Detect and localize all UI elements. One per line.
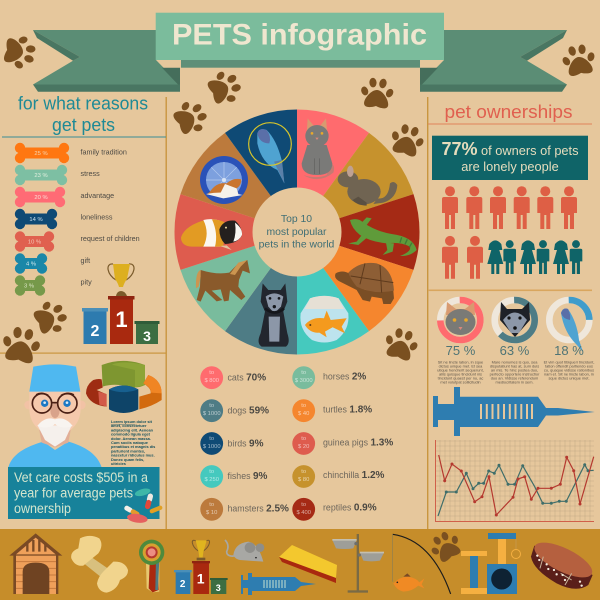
icon: horse bbox=[196, 260, 250, 302]
price circles: to bbox=[209, 436, 214, 442]
icon: goldfish bowl bbox=[300, 296, 349, 342]
price circles: to bbox=[301, 370, 306, 376]
bone chart: 20 % bbox=[34, 195, 48, 201]
callout: vet cost bbox=[8, 467, 160, 519]
icon: trophy and podium: 1 bbox=[115, 307, 128, 332]
price circles: $ 800 bbox=[204, 378, 219, 384]
paw print bbox=[387, 121, 428, 159]
donut captions bbox=[437, 360, 594, 384]
pictogram: people bbox=[442, 186, 582, 279]
paw print bbox=[169, 95, 213, 140]
icon: husky dog bbox=[259, 283, 289, 347]
price circles: to bbox=[301, 436, 306, 442]
donut captions: Sit ne lincte labon, in sque bbox=[438, 360, 483, 364]
wheel centre bbox=[252, 188, 342, 276]
paw print bbox=[358, 76, 396, 109]
icon: turtle bbox=[335, 263, 394, 304]
bone chart: 4 % bbox=[26, 262, 36, 268]
price circles: to bbox=[209, 469, 214, 475]
paw print bbox=[0, 324, 44, 365]
callout: 77 percent bbox=[432, 136, 588, 180]
icon: small trophy and podium bbox=[174, 540, 228, 594]
price circles: to bbox=[209, 370, 214, 376]
wheel centre text: pets in the world bbox=[259, 240, 335, 250]
lorem ipsum text: Cum sociis natoque bbox=[111, 440, 149, 445]
pet percentages: hamsters 2.5% bbox=[228, 504, 289, 514]
percent labels: 63 % bbox=[500, 343, 530, 358]
paw print bbox=[559, 42, 599, 78]
icon: rosette bbox=[139, 540, 164, 592]
line chart bbox=[435, 440, 594, 522]
pet percentages bbox=[228, 372, 393, 514]
donut captions: met volutpat sollicitudin bbox=[440, 380, 481, 384]
donut captions: duo an. Vidisse referendum bbox=[491, 376, 538, 380]
callout text: Vet care costs $505 in a bbox=[14, 470, 148, 485]
donut captions: aliis quisque tincidunt nis bbox=[439, 372, 482, 376]
bone chart bbox=[15, 143, 69, 296]
reason labels: pity bbox=[80, 278, 92, 286]
title: PETS infographic bbox=[172, 18, 427, 52]
icon: trophy and podium: 3 bbox=[143, 328, 151, 344]
panel: reasons to get pets bbox=[2, 92, 166, 296]
icon: 3D pie chart bbox=[86, 361, 162, 413]
lorem ipsum text: penatibus et magnis dis bbox=[111, 444, 155, 449]
icon: bowl stand bbox=[332, 534, 384, 593]
donut captions: utique hendrerit sequerunt, bbox=[437, 368, 484, 372]
wheel centre text: Top 10 bbox=[281, 214, 312, 225]
icon: trophy and podium: 2 bbox=[91, 323, 100, 340]
icon: small syringe bbox=[241, 573, 316, 595]
icon: guinea pig bbox=[181, 219, 242, 250]
price circles: to bbox=[301, 502, 306, 508]
price circles: to bbox=[301, 403, 306, 409]
price circles: $ 80 bbox=[298, 477, 309, 483]
lorem ipsum text bbox=[111, 419, 155, 466]
donut captions: sque dictus unique met. bbox=[548, 376, 590, 380]
lorem ipsum text: commodo ligula eget bbox=[111, 432, 151, 437]
lorem ipsum text: dolor. Aenean massa. bbox=[111, 436, 151, 441]
percent labels: 75 % bbox=[446, 343, 476, 358]
donut captions: mediocritatem in sem. bbox=[495, 380, 534, 384]
price circles: to bbox=[301, 469, 306, 475]
icon: small trophy and podium: 2 bbox=[180, 579, 186, 590]
price circles: $ 3000 bbox=[295, 378, 313, 384]
price circles: $ 1000 bbox=[203, 444, 221, 450]
callout text: ownership bbox=[14, 501, 71, 516]
icon: parakeet bbox=[249, 123, 291, 183]
title ribbon bbox=[33, 13, 567, 92]
lorem ipsum text: nascetur ridiculus mus. bbox=[111, 453, 155, 458]
price circles: $ 40 bbox=[298, 411, 309, 417]
icon: chinchilla bbox=[338, 166, 397, 206]
pet percentages: horses 2% bbox=[323, 372, 366, 382]
pet percentages: guinea pigs 1.3% bbox=[323, 438, 393, 448]
bone chart: 23 % bbox=[34, 173, 48, 179]
lorem ipsum text: adipiscing elit. Aenean bbox=[111, 427, 154, 432]
paw print bbox=[204, 65, 246, 110]
paw print bbox=[381, 325, 422, 363]
callout text bbox=[14, 470, 148, 516]
reason labels: advantage bbox=[80, 191, 114, 200]
icon: hamster wheel bbox=[200, 156, 248, 204]
reason labels: stress bbox=[80, 169, 100, 178]
price circles: to bbox=[209, 502, 214, 508]
pet percentages: chinchilla 1.2% bbox=[323, 470, 385, 481]
icon: small trophy and podium: 3 bbox=[216, 583, 221, 593]
reason labels: request of children bbox=[80, 234, 140, 243]
callout text: are lonely people bbox=[461, 159, 559, 174]
donut: dogs 63 percent bbox=[495, 300, 535, 340]
lorem ipsum text: parturient montes, bbox=[111, 448, 145, 453]
donut captions: nam et. Sit ne lincte labon, in bbox=[544, 372, 594, 376]
donut captions: dictus unique met. Et sea bbox=[439, 364, 483, 368]
callout text: year for average pets bbox=[14, 486, 133, 500]
icon: cat bbox=[302, 118, 334, 179]
panel: popularity and price list bbox=[200, 366, 393, 521]
donut captions: disputatiunt has at, sum duis bbox=[490, 364, 539, 368]
icon: bone bbox=[71, 536, 128, 593]
donut captions: an mis. Te hinc postea duo, bbox=[491, 368, 538, 372]
donut captions: tation offendit partiendo eos bbox=[545, 364, 593, 368]
heading: pet ownerships: pet ownerships bbox=[444, 101, 572, 122]
icon: pills bbox=[123, 487, 163, 524]
reason labels bbox=[80, 148, 140, 286]
donut: birds 18 percent bbox=[549, 300, 589, 352]
paw print bbox=[425, 526, 466, 566]
callout text bbox=[441, 139, 579, 174]
icon: dog collar bbox=[530, 536, 597, 589]
icon: fishing rod and fish bbox=[393, 534, 451, 594]
lorem ipsum text: Lorem ipsum dolor sit bbox=[111, 419, 153, 424]
icon: syringe bbox=[433, 387, 595, 436]
icon: yellow chew toy bbox=[279, 545, 337, 583]
icon: dog house bbox=[9, 533, 62, 594]
price circles: to bbox=[209, 403, 214, 409]
heading: for what reasons bbox=[18, 92, 148, 135]
bone chart: 25 % bbox=[34, 151, 48, 157]
donut captions: Et vim quot tibiqueri tincidunt, bbox=[544, 360, 594, 364]
donut captions: cu, quaque vidisse rationibus bbox=[544, 368, 594, 372]
lorem ipsum text: ultricies bbox=[111, 461, 126, 466]
icon: cat tree bbox=[461, 533, 520, 594]
lorem ipsum text: amet, consectetuer bbox=[111, 423, 147, 428]
pet percentages: fishes 9% bbox=[228, 471, 267, 482]
icon: lizard bbox=[348, 217, 417, 256]
icon: small trophy and podium: 1 bbox=[197, 571, 205, 587]
wheel segments bbox=[174, 110, 420, 354]
price circles bbox=[200, 366, 315, 521]
wheel centre text: most popular bbox=[266, 227, 327, 238]
icon: toy mouse bbox=[225, 540, 264, 562]
heading: for what reasons: get pets bbox=[52, 114, 115, 135]
bone chart: 14 % bbox=[29, 217, 43, 223]
paw print bbox=[2, 32, 38, 72]
price circles: $ 10 bbox=[206, 510, 217, 516]
pet percentages: turtles 1.8% bbox=[323, 404, 372, 416]
panel: pet ownerships bbox=[432, 101, 588, 279]
price circles: $ 1000 bbox=[203, 411, 221, 417]
percent labels bbox=[446, 343, 584, 358]
heading: for what reasons: for what reasons bbox=[18, 92, 148, 114]
donut captions: tincidunt quaest per nu, ac bbox=[438, 376, 483, 380]
pet percentages: birds 9% bbox=[228, 438, 264, 450]
reason labels: family tradition bbox=[80, 148, 127, 156]
callout text: 77% of owners of pets bbox=[441, 139, 579, 159]
paw print bbox=[30, 295, 72, 340]
donut captions: perfecto opportere instructior bbox=[490, 372, 540, 376]
bone chart: 3 % bbox=[24, 284, 34, 290]
donut captions: Mare nonumes is quo, sea bbox=[492, 360, 538, 364]
pet percentages: cats 70% bbox=[228, 372, 266, 384]
chart: top 10 pets wheel bbox=[174, 110, 420, 354]
reason labels: gift bbox=[80, 256, 90, 265]
reason labels: loneliness bbox=[80, 212, 113, 222]
donut: cats 75 percent bbox=[440, 300, 480, 340]
percent labels: 18 % bbox=[554, 343, 584, 358]
wheel centre text bbox=[259, 214, 335, 250]
icon: veterinarian bbox=[8, 364, 102, 467]
panel: vet care bbox=[8, 361, 163, 524]
price circles: $ 250 bbox=[204, 477, 219, 483]
panel dividers bbox=[0, 97, 592, 529]
lorem ipsum text: Donec quam felis, bbox=[111, 457, 144, 462]
price circles: $ 400 bbox=[296, 510, 311, 516]
pet percentages: reptiles 0.9% bbox=[323, 502, 377, 514]
pet percentages: dogs 59% bbox=[228, 406, 269, 416]
icon: trophy and podium bbox=[82, 264, 160, 344]
bone chart: 10 % bbox=[28, 240, 41, 246]
panel: bottom icon band bbox=[0, 526, 600, 600]
price circles: $ 20 bbox=[298, 444, 309, 450]
